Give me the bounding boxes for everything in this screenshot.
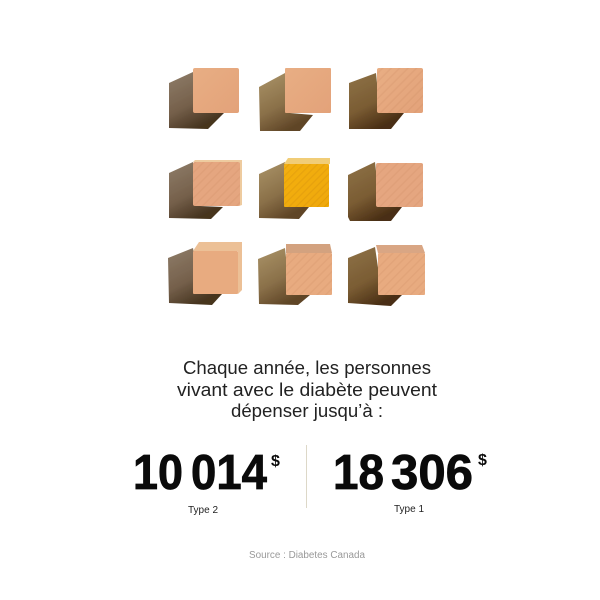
wooden block 7	[168, 242, 242, 305]
stat: type 1 cost: 306	[391, 446, 473, 500]
heading text: vivant avec le diabète peuvent	[177, 380, 437, 400]
stat: type 1 cost	[333, 446, 487, 515]
stat: type 1 cost: $	[478, 452, 487, 469]
stat: type 2 cost: $	[271, 453, 280, 470]
stat: type 2 cost	[133, 446, 280, 516]
source note: Source : Diabetes Canada	[249, 550, 365, 561]
wooden block 6	[348, 162, 423, 221]
heading text	[177, 358, 437, 421]
wooden block 9	[348, 245, 425, 306]
wooden block 8	[258, 244, 332, 305]
stat: type 1 cost: Type 1	[394, 504, 424, 515]
divider	[306, 445, 307, 508]
heading text: dépenser jusqu’à :	[231, 401, 383, 421]
stat: type 1 cost: 18	[333, 446, 384, 500]
stat: type 2 cost: Type 2	[188, 505, 218, 516]
wooden block 3	[349, 68, 423, 129]
highlighted yellow block	[259, 158, 330, 219]
wooden block 2	[259, 68, 331, 131]
wooden block 4	[169, 160, 242, 219]
wooden block 1	[169, 68, 239, 129]
heading text: Chaque année, les personnes	[183, 358, 431, 378]
stat: type 2 cost: 014	[191, 446, 267, 500]
stat: type 2 cost: 10	[133, 446, 183, 500]
